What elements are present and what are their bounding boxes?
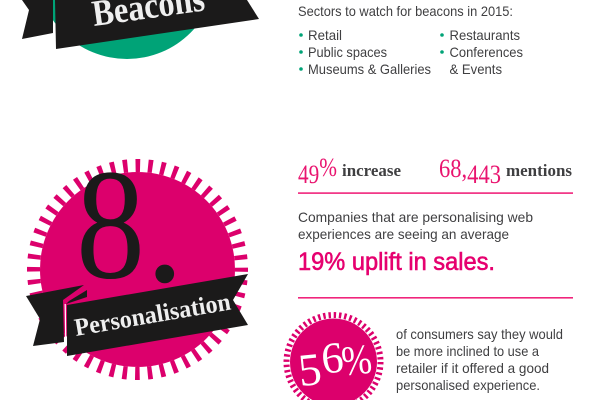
ribbon back tail	[22, 0, 53, 39]
consumers text: be more inclined to use a	[396, 343, 539, 359]
bullets right	[440, 33, 444, 54]
personalising text: experiences are seeing an average	[298, 226, 509, 242]
list left	[308, 27, 431, 77]
ticked ring	[286, 315, 380, 400]
ribbon fold	[66, 290, 87, 304]
number 8: 8	[76, 138, 145, 313]
ribbon title: Personalisation	[72, 289, 233, 342]
list left: Retail	[308, 27, 342, 43]
consumers text: personalised experience.	[396, 377, 540, 393]
list right: Conferences	[450, 44, 523, 60]
list right	[450, 27, 523, 77]
badge: personalisation	[26, 138, 248, 374]
stat: 49%: %	[319, 153, 337, 182]
ticked ring	[34, 166, 242, 374]
consumers text	[396, 326, 563, 393]
list right: Restaurants	[450, 27, 520, 43]
ribbon edge highlight	[64, 304, 67, 343]
pink circle	[40, 172, 235, 367]
list left: Museums & Galleries	[308, 61, 431, 77]
percent value: 5	[296, 343, 324, 396]
ribbon back tail	[26, 285, 84, 346]
list right: & Events	[450, 61, 502, 77]
stat: 49%: 49	[298, 160, 319, 189]
personalising text: Companies that are personalising web	[298, 209, 533, 225]
personalising text	[298, 209, 533, 242]
stat: 68,443: 443	[467, 160, 501, 189]
green circle	[37, 0, 217, 59]
list left: Public spaces	[308, 44, 387, 60]
stat label: increase: increase	[342, 161, 401, 180]
percent value: %	[339, 337, 374, 385]
pink circle	[290, 318, 377, 400]
uplift callout: 19% uplift in sales.	[298, 248, 495, 276]
percent value: 6	[319, 333, 346, 384]
badge: beacons	[22, 0, 259, 59]
stat label: mentions: mentions	[506, 161, 572, 180]
ribbon front	[67, 274, 248, 356]
consumers text: of consumers say they would	[396, 326, 563, 342]
bullets left	[299, 33, 303, 71]
percent value	[295, 330, 375, 396]
sectors heading: Sectors to watch for beacons in 2015:	[298, 3, 513, 19]
badge: 56%	[286, 315, 380, 400]
stat: 68,443: 68,	[439, 154, 472, 183]
number dot: .	[145, 141, 184, 316]
ribbon front	[55, 0, 259, 49]
consumers text: retailer if it offered a good	[396, 360, 549, 376]
sectors list	[298, 3, 523, 77]
stats row	[298, 153, 572, 189]
